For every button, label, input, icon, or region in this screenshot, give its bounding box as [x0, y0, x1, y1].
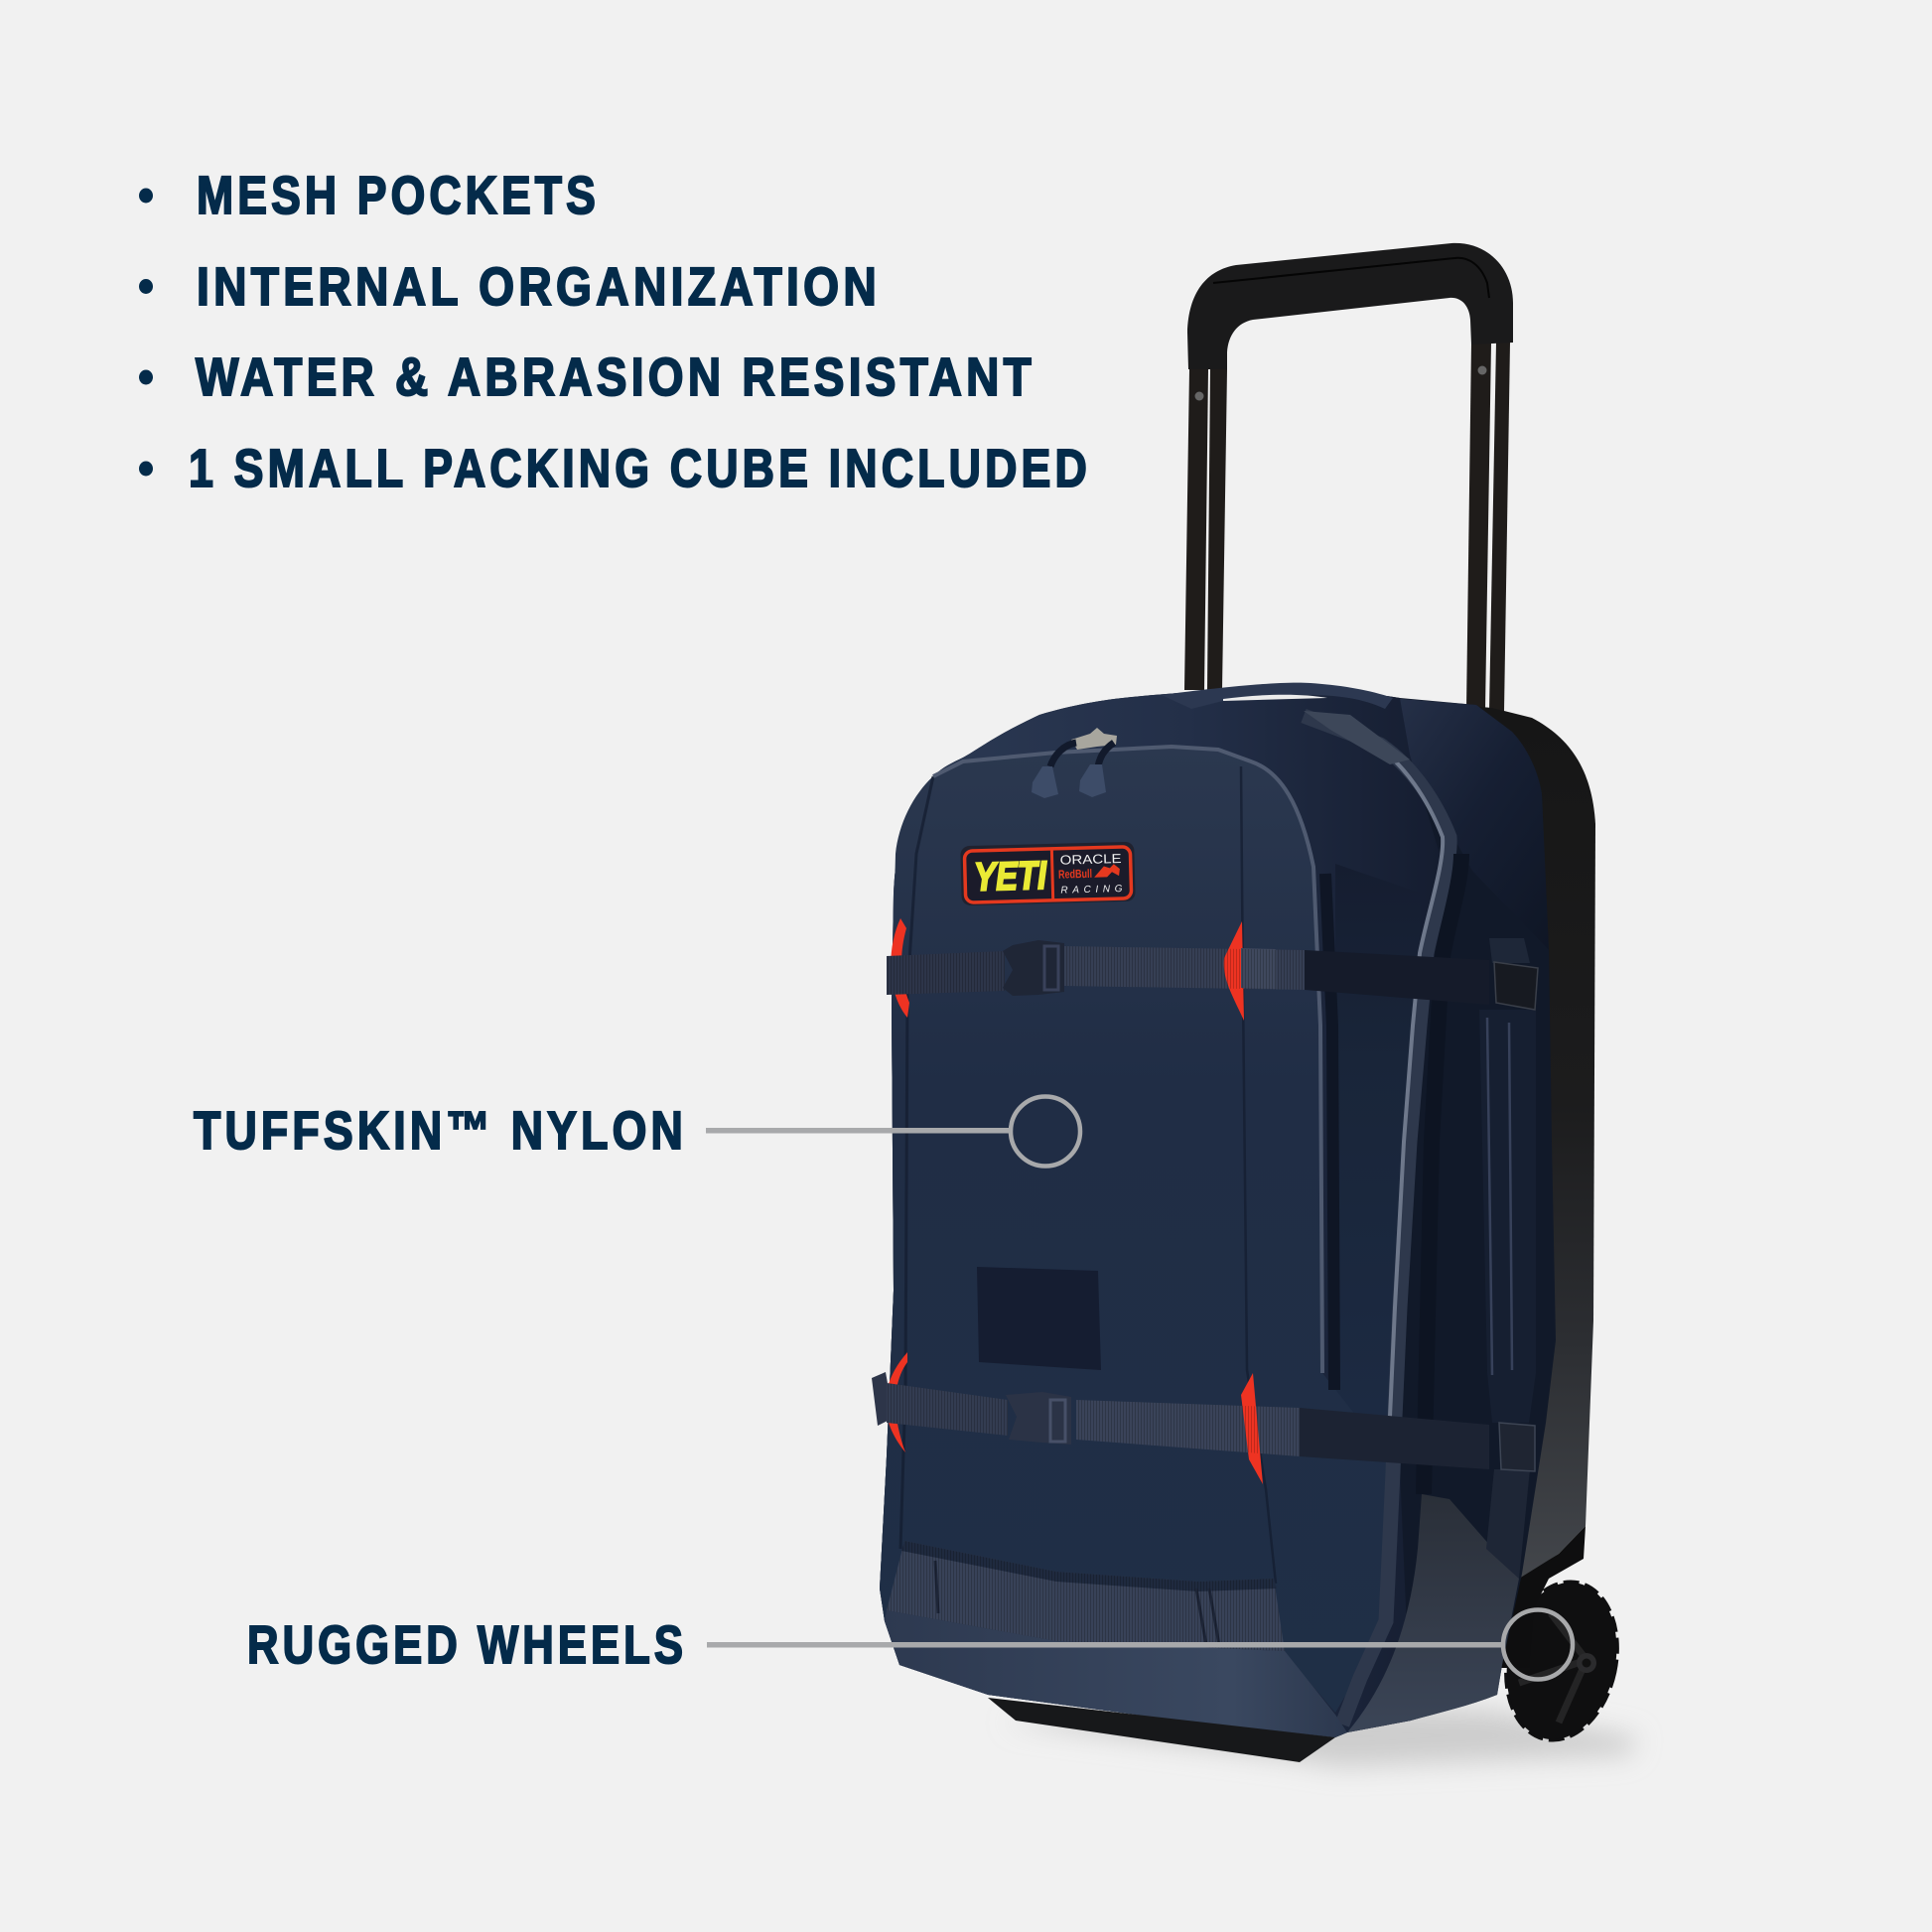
- hard shell back: [1469, 706, 1595, 1588]
- logo mark: bulls: [1094, 864, 1120, 878]
- top carry handle: [1162, 683, 1410, 764]
- bag body: [880, 689, 1440, 1737]
- bag silhouette: [880, 689, 1556, 1737]
- logo text: ORACLE: ORACLE: [1059, 851, 1122, 868]
- luggage illustration: [872, 243, 1638, 1767]
- corner panel: [1347, 1494, 1519, 1732]
- callout leader line: [707, 1642, 1502, 1648]
- feature: internal organization: INTERNAL ORGANIZATION: [197, 257, 881, 317]
- feature: packing cube: 1 SMALL PACKING CUBE INCLUDED: [189, 439, 1091, 498]
- logo text: Red Bull: RedBull: [1058, 867, 1092, 882]
- front panel: [880, 747, 1393, 1713]
- callout label: RUGGED WHEELS: [247, 1615, 687, 1675]
- callout marker circle: [1503, 1610, 1573, 1680]
- side vertical strap: [1479, 938, 1536, 1579]
- buckle: [1006, 1392, 1071, 1445]
- feature list: [139, 166, 1091, 498]
- upper strap: [887, 918, 1538, 1021]
- side panel upper flap: [1380, 698, 1549, 950]
- feature: mesh pockets: MESH POCKETS: [197, 166, 600, 225]
- buckle: [1003, 940, 1064, 996]
- callout: rugged wheels: [247, 1610, 1573, 1680]
- velcro patch: [977, 1267, 1101, 1370]
- logo text: YETI: YETI: [974, 854, 1047, 899]
- floor shadow: [1003, 1703, 1638, 1767]
- panel seams: [900, 766, 1276, 1584]
- feature: water and abrasion resistant: WATER & ABRASION RESISTANT: [196, 347, 1035, 407]
- wheel housing: [1497, 1526, 1586, 1668]
- logo text: RACING: RACING: [1060, 884, 1123, 897]
- wheel: [1491, 1571, 1632, 1751]
- logo patch: [960, 842, 1136, 905]
- bottom trim: [885, 1610, 1347, 1737]
- telescoping handle: [1184, 243, 1513, 712]
- callout marker circle: [1011, 1096, 1080, 1166]
- callout label: TUFFSKIN™ NYLON: [194, 1101, 687, 1161]
- zipper pulls: [1032, 728, 1117, 798]
- lower strap: [872, 1352, 1535, 1484]
- zipper piping: [933, 716, 1461, 1725]
- bottom grab handle: [887, 1541, 1285, 1651]
- callout: tuffskin nylon: [194, 1096, 1080, 1166]
- strap end tab: [1499, 1423, 1535, 1471]
- mid side cloth: [1335, 864, 1422, 1420]
- base plate: [988, 1698, 1335, 1762]
- strap end tab: [1494, 962, 1538, 1010]
- callout leader line: [706, 1128, 1010, 1134]
